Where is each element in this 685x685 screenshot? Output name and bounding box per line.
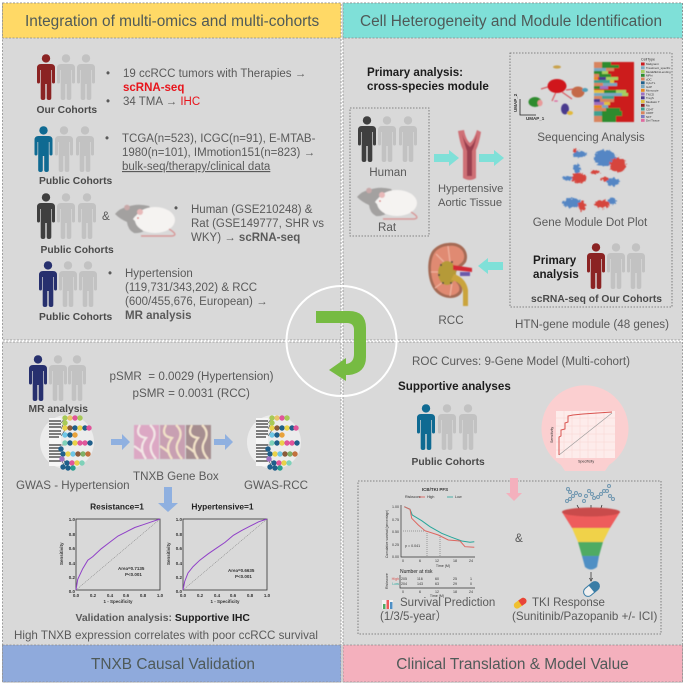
chart: Kaplan-Meier PFS: 6 <box>419 559 421 563</box>
icon: pill <box>582 580 601 598</box>
cohort icon: MR analysis <box>28 355 88 415</box>
chart: ROC Resistance=1: 0.6 <box>69 546 75 551</box>
legend: cell types: Malignant <box>646 62 659 66</box>
chart: Kaplan-Meier PFS: 0 <box>402 559 404 563</box>
cohort row: MR analysis: Hypertension <box>125 268 193 280</box>
icon: GWAS hypertension <box>40 415 94 471</box>
legend: cell types: CD4T <box>646 107 654 111</box>
text: primary analysis: Primary <box>533 254 576 267</box>
chart: ROC Hypertensive=1: 1 - Specificity <box>210 599 240 604</box>
chart: Kaplan-Meier PFS: Time (M) <box>436 564 450 568</box>
table: number at risk: 116 <box>417 577 423 581</box>
icon: drug molecules <box>566 484 614 502</box>
heading bar: clinical translation: Clinical Translation & Model Value <box>396 656 629 673</box>
table: number at risk: 1 <box>470 577 472 581</box>
chart: ROC Resistance=1: 0.4 <box>107 593 114 598</box>
cohort row: MR analysis: Public Cohorts <box>39 312 112 323</box>
cohort row: our cohorts: • <box>106 96 110 108</box>
chart: Kaplan-Meier PFS: 0.75 <box>392 518 399 522</box>
cohort row: human and rat scRNA-seq: Human (GSE210248) & <box>191 204 313 216</box>
label: HTN-gene module: HTN-gene module (48 genes) <box>515 318 669 331</box>
legend: cell types: GAP <box>646 85 652 89</box>
cohort row: MR analysis: • <box>108 268 112 280</box>
heading bar: TNXB causal validation <box>2 645 341 682</box>
label: gene module dot plot: Gene Module Dot Plot <box>533 216 648 229</box>
chart: Kaplan-Meier PFS: p = 0.041 <box>405 544 420 548</box>
chart: ROC Resistance=1: 0.8 <box>69 532 75 537</box>
table: number at risk: 25 <box>453 577 457 581</box>
arrows: molecules into funnel <box>577 505 602 514</box>
chart: ROC Hypertensive=1: 0.2 <box>197 593 204 598</box>
chart: Kaplan-Meier PFS: ICB/TKI PFS <box>422 487 448 492</box>
panel: clinical translation and model value <box>343 342 682 682</box>
chart: ROC Resistance=1: Sensitivity <box>59 542 64 565</box>
cohort row: public bulk data <box>34 126 316 187</box>
cohort row: public bulk data: Public Cohorts <box>39 176 112 187</box>
heading: primary analysis cross-species: cross-species module <box>367 80 489 93</box>
arrow: gene box to GWAS RCC <box>214 434 233 450</box>
legend: cell types: Monocyte <box>646 88 659 92</box>
icon: ROC curve illustration: Specificity <box>578 460 594 464</box>
label: TNXB gene box: TNXB Gene Box <box>133 470 219 483</box>
heading bar: integration <box>2 3 341 38</box>
heading bar: cell heterogeneity: Cell Heterogeneity and Module Identification <box>360 13 662 30</box>
chart: ROC Hypertensive=1: 0.0 <box>180 593 187 598</box>
legend: cell types: Mo <box>646 104 650 108</box>
cohort icon: public cohorts: Public Cohorts <box>412 457 485 468</box>
image: TNXB tissue sections <box>134 425 211 459</box>
cohort icon: MR analysis: MR analysis <box>28 404 88 415</box>
chart: ROC Hypertensive=1: 0.4 <box>214 593 221 598</box>
table: number at risk: High <box>392 577 399 581</box>
table: number at risk: 24 <box>469 590 473 594</box>
table: number at risk: Low <box>392 582 399 586</box>
text: survival horizons: (1/3/5-year） <box>380 610 447 623</box>
cohort row: MR analysis: MR analysis <box>125 310 191 322</box>
heading: primary analysis cross-species: Primary analysis: <box>367 66 463 79</box>
chart: ROC Hypertensive=1: Sensitivity <box>166 542 171 565</box>
chart: ROC Hypertensive=1: 1.0 <box>176 517 182 522</box>
table: number at risk: 204 <box>401 582 407 586</box>
legend: cell types: TNCD <box>646 92 654 96</box>
cohort row: human and rat scRNA-seq <box>37 193 324 256</box>
cohort row: our cohorts: • <box>106 68 110 80</box>
chart: ROC Resistance=1: 0.2 <box>90 593 97 598</box>
panel: TNXB causal validation <box>2 342 341 682</box>
cohort row: human and rat scRNA-seq: & <box>102 210 110 223</box>
cohort icon: our cohorts <box>587 243 645 289</box>
text: TNXB survival finding: High TNXB expression correlates with poor ccRCC survival <box>14 629 318 642</box>
chart: Kaplan-Meier PFS: Low <box>455 495 462 499</box>
chart: ROC Resistance=1: Resistance=1 <box>90 502 144 512</box>
chart: ROC Resistance=1: 1.0 <box>157 593 164 598</box>
chart: UMAP: UMAP_1 <box>526 116 545 121</box>
cohort row: public bulk data: • <box>105 133 109 145</box>
table: number at risk <box>385 569 475 598</box>
arrow: funnel to pill <box>590 572 592 581</box>
chart: ROC Resistance=1: P<0.001 <box>125 572 142 577</box>
heading bar: TNXB causal validation: TNXB Causal Validation <box>91 656 255 673</box>
legend: cell types: CellType <box>641 58 655 62</box>
legend: cell types: Treatment_specific <box>646 66 671 70</box>
arrow: down to ROC charts <box>158 487 178 512</box>
chart: ROC Hypertensive=1: 0.8 <box>247 593 254 598</box>
box: species: Rat <box>378 221 397 234</box>
label: hypertensive aortic tissue: Aortic Tissue <box>438 197 502 209</box>
text: pSMR values: pSMR = 0.0029 (Hypertension) <box>110 370 274 383</box>
chart: ROC Resistance=1: 0.4 <box>69 561 75 566</box>
center ring <box>286 286 396 396</box>
cohort row: MR analysis <box>39 261 268 323</box>
icon: ROC curve illustration <box>542 385 628 471</box>
text: primary analysis: analysis <box>533 268 579 281</box>
cohort row: human and rat scRNA-seq: • <box>174 203 178 215</box>
table: number at risk: Number at risk <box>400 569 433 575</box>
cohort row: MR analysis: (600/455,676, European) → <box>125 296 268 308</box>
chart: Kaplan-Meier PFS: 24 <box>469 559 473 563</box>
chart: ROC Hypertensive=1: Area=0.6635 <box>228 568 255 573</box>
label: hypertensive aortic tissue: Hypertensive <box>438 183 503 195</box>
chart: ROC Resistance=1: 0.0 <box>73 593 80 598</box>
legend: cell types: CD8T <box>646 111 654 115</box>
chart: ROC Resistance=1: 0.8 <box>140 593 147 598</box>
chart: ROC Resistance=1: 1.0 <box>69 517 75 522</box>
legend: cell types: MetaMECH-ending <box>646 70 671 74</box>
cohort row: human and rat scRNA-seq: Public Cohorts <box>40 245 114 256</box>
table: number at risk: 12 <box>435 590 439 594</box>
legend: cell types: CytoTL <box>646 81 656 85</box>
table: number at risk: 29 <box>453 582 457 586</box>
icon: rats <box>115 205 175 236</box>
chart: ROC Hypertensive=1: 0.4 <box>176 561 182 566</box>
chart: ROC Hypertensive=1: 0.0 <box>176 589 182 594</box>
heading bar: cell heterogeneity <box>343 3 682 38</box>
label: sequencing analysis: Sequencing Analysis <box>537 131 645 144</box>
chart: Kaplan-Meier PFS: Riskscore <box>405 495 421 499</box>
text: pSMR values: pSMR = 0.0031 (RCC) <box>132 387 250 400</box>
chart: ROC Hypertensive=1: 0.6 <box>176 546 182 551</box>
cohort row: public bulk data: TCGA(n=523), ICGC(n=91), E-MTAB- <box>122 133 316 145</box>
table: number at risk: 18 <box>453 590 457 594</box>
chart: ROC Resistance=1: 0.6 <box>123 593 130 598</box>
chart: Kaplan-Meier PFS: 0.00 <box>392 555 399 559</box>
arrow: tissue to sequencing <box>479 150 504 166</box>
legend: cell types: TregS <box>646 96 654 100</box>
table: number at risk: Time (M) <box>430 594 444 598</box>
text: ROC curves caption: ROC Curves: 9-Gene Model (Multi-cohort) <box>412 355 630 368</box>
label: RCC: RCC <box>438 314 464 327</box>
chart: ROC Hypertensive=1: 0.2 <box>176 575 182 580</box>
arrow: down to outputs <box>506 478 522 501</box>
chart: Kaplan-Meier PFS: High <box>427 495 434 499</box>
chart: funnel <box>562 508 620 570</box>
icon: GWAS RCC <box>247 415 301 471</box>
arrow: GWAS to gene box <box>111 434 130 450</box>
cohort row: human and rat scRNA-seq: Rat (GSE149777, SHR vs <box>191 218 324 230</box>
chart: Kaplan-Meier PFS: 0.50 <box>392 530 399 534</box>
table: number at risk: 143 <box>417 582 423 586</box>
icon: pill emoji <box>513 596 528 610</box>
legend: cell types <box>641 58 671 122</box>
label: scRNA-seq of our cohorts: scRNA-seq of Our Cohorts <box>531 294 662 305</box>
chart: Kaplan-Meier PFS: 18 <box>453 559 457 563</box>
chart: ROC Hypertensive=1: P<0.001 <box>235 574 252 579</box>
chart: Kaplan-Meier PFS: 12 <box>435 559 439 563</box>
panel: cell heterogeneity and module identification <box>343 3 682 340</box>
chart: ROC Hypertensive=1: Hypertensive=1 <box>191 502 254 512</box>
chart: UMAP: UMAP_2 <box>513 93 518 112</box>
panel: integration of multi-omics and multi-cohorts <box>2 3 341 340</box>
cohort row: MR analysis: (119,731/343,202) & RCC <box>125 282 257 294</box>
box: species <box>350 108 429 236</box>
chart: ROC Hypertensive=1: 1.0 <box>264 593 271 598</box>
text: ampersand: & <box>515 532 523 545</box>
legend: cell types: Del Tissue <box>646 118 660 122</box>
text: validation analysis: Validation analysis: Supportive IHC <box>76 613 250 624</box>
heading bar: integration: Integration of multi-omics and multi-cohorts <box>25 13 320 30</box>
icon: ROC curve illustration: Sensitivity <box>550 427 554 443</box>
table: number at risk: 0 <box>470 582 472 586</box>
label: GWAS hypertension: GWAS - Hypertension <box>16 479 130 492</box>
chart: ROC Hypertensive=1 <box>166 502 271 604</box>
cohort row: our cohorts: Our Cohorts <box>36 105 97 116</box>
chart: ROC Resistance=1 <box>59 502 164 604</box>
cohort row: public bulk data: 1980(n=101), IMmotion151(n=823) → <box>122 147 315 159</box>
arrow: to RCC <box>478 258 503 274</box>
chart: ROC Resistance=1: 0.2 <box>69 575 75 580</box>
icon: kidney <box>428 243 472 306</box>
cohort row: our cohorts: 19 ccRCC tumors with Therapies → <box>123 68 306 80</box>
table: number at risk: 0 <box>402 590 404 594</box>
box: primary analyses <box>510 53 672 307</box>
chart: ROC Hypertensive=1: 0.8 <box>176 532 182 537</box>
box: species: Human <box>369 166 407 179</box>
cohort row: our cohorts <box>36 54 306 116</box>
arrow: species to tissue <box>434 150 459 166</box>
table: number at risk: Riskscore <box>385 573 389 589</box>
heading bar: clinical translation <box>343 645 682 682</box>
text: TKI response: TKI Response <box>532 597 605 609</box>
legend: cell types: NFT <box>646 115 652 119</box>
cohort row: human and rat scRNA-seq: WKY) → scRNA-seq <box>191 232 300 244</box>
chart: ROC Hypertensive=1: 0.6 <box>230 593 237 598</box>
icon: bar chart emoji <box>382 600 393 609</box>
chart: Kaplan-Meier PFS <box>385 487 475 568</box>
text: TKI regimens: (Sunitinib/Pazopanib +/- ICI) <box>512 610 657 623</box>
legend: cell types: MPhi <box>646 74 653 78</box>
cohort icon: public cohorts <box>412 404 485 468</box>
chart: ROC Resistance=1: 0.0 <box>69 589 75 594</box>
table: number at risk: 205 <box>401 577 407 581</box>
table: number at risk: 6 <box>419 590 421 594</box>
box: clinical outputs <box>358 478 661 634</box>
chart: UMAP <box>513 65 588 121</box>
cohort row: public bulk data: bulk-seq/therapy/clinical data <box>122 161 271 173</box>
table: number at risk: 60 <box>435 577 439 581</box>
icon: aortic tissue <box>458 130 481 180</box>
chart: cell-type stacked bars <box>594 62 634 122</box>
cohort row: our cohorts: 34 TMA → IHC <box>123 96 200 108</box>
chart: ROC Resistance=1: 1 - Specificity <box>103 599 133 604</box>
chart: Kaplan-Meier PFS: 0.25 <box>392 543 399 547</box>
arrow: central green flow arrow <box>316 311 366 381</box>
cohort row: our cohorts: scRNA-seq <box>123 82 184 94</box>
label: GWAS-RCC: GWAS-RCC <box>244 479 308 492</box>
chart: gene module dot plot <box>562 149 626 211</box>
text: survival prediction: Survival Prediction <box>400 597 495 609</box>
legend: cell types: Mediator T <box>646 100 660 104</box>
chart: Kaplan-Meier PFS: 1.00 <box>392 505 399 509</box>
legend: cell types: cDC <box>646 77 652 81</box>
table: number at risk: 63 <box>435 582 439 586</box>
chart: ROC Resistance=1: Area=0.7135 <box>118 566 145 571</box>
chart: Kaplan-Meier PFS: Cumulative survival (percentage) <box>385 510 389 558</box>
text: supportive analyses: Supportive analyses <box>398 380 511 393</box>
